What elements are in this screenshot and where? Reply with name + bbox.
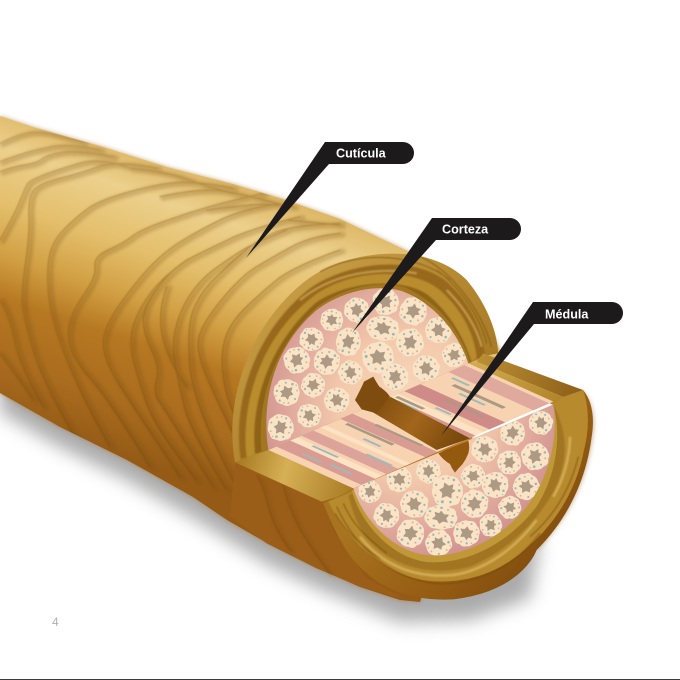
callout: Cutícula (246, 142, 414, 258)
callout: Corteza: Corteza (442, 222, 489, 236)
lower cortex disc with cells (353, 405, 557, 561)
upper medulla notch (355, 377, 390, 413)
cross-section and cut (230, 254, 594, 600)
rim glow, right side (520, 390, 594, 550)
dark side wall under the cut (230, 462, 407, 600)
cut wall, right (468, 353, 583, 405)
page number: 4 (52, 615, 59, 629)
bottom edge bar (0, 679, 680, 680)
medulla channel (363, 397, 470, 450)
lower cuticle rim (323, 390, 593, 600)
callout: Médula (441, 302, 623, 436)
upper cortex disc with cells (266, 286, 471, 450)
hair shaft body (0, 116, 500, 602)
callout: Cutícula: Cutícula (336, 146, 387, 160)
cast shadow under hair (0, 340, 540, 622)
cuticle scale lines (0, 132, 343, 501)
callout: Corteza (352, 218, 521, 333)
lower medulla notch (438, 441, 469, 473)
callout: Médula: Médula (545, 308, 589, 322)
exposed cortex fibres (268, 363, 553, 488)
hair strand illustration (0, 116, 594, 602)
upper cuticle rim (232, 254, 498, 462)
cut floor, left (235, 450, 353, 502)
